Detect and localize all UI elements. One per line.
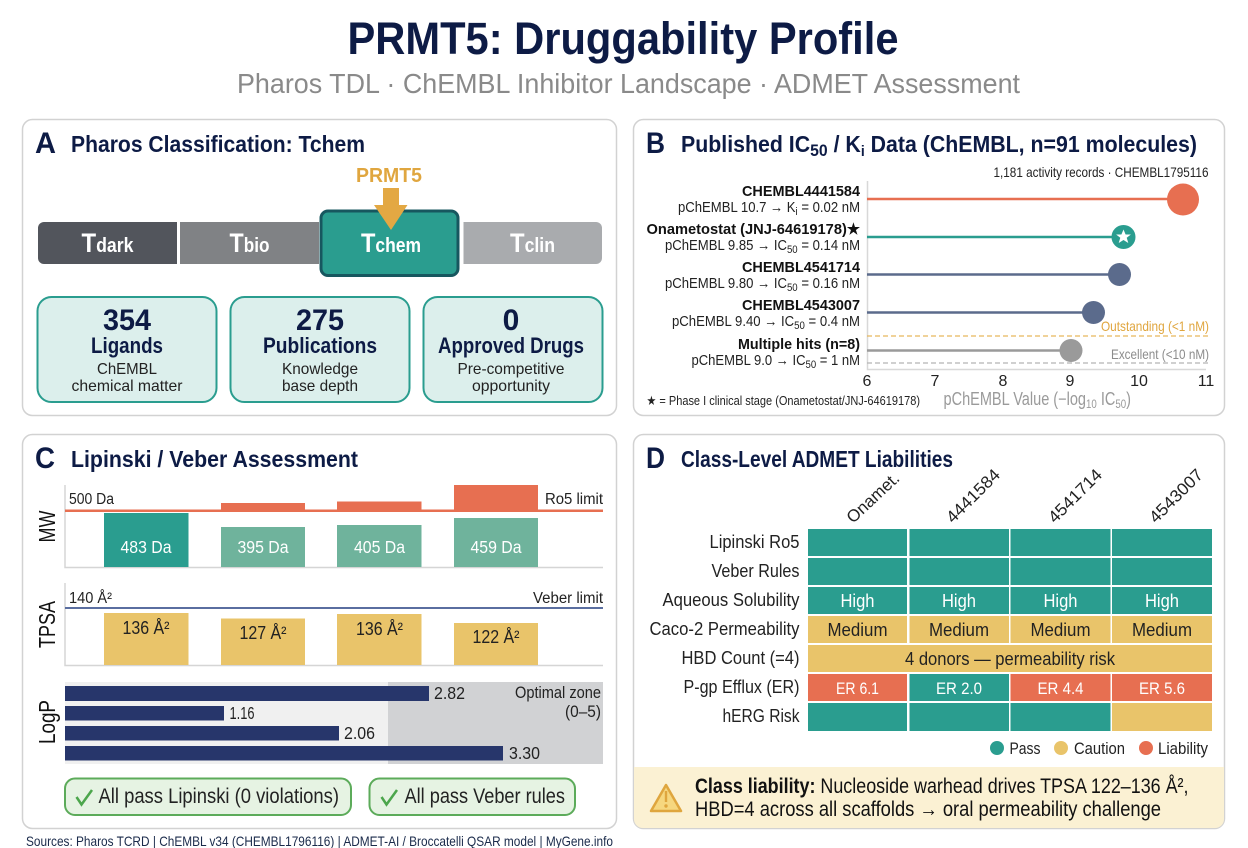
heatmap cell values <box>828 591 1192 698</box>
panel B heading: Published IC <box>681 131 820 157</box>
MW limit line: Ro5 limit <box>545 491 604 508</box>
row: CHEMBL4543007: CHEMBL4543007 <box>742 297 860 314</box>
row: CHEMBL4543007 <box>672 297 1105 332</box>
heatmap column headers: 4541714 <box>1044 465 1106 527</box>
row: Onametostat: = 0.14 nM <box>798 237 860 254</box>
MW bars: 405 Da <box>354 537 405 557</box>
row: CHEMBL4541714: = 0.16 nM <box>798 275 860 292</box>
panel B: published IC50 data <box>634 120 1224 416</box>
footnote: phase I star: ★ = Phase I clinical stage (Onametostat/JNJ-64619178) <box>646 393 920 408</box>
TPSA limit line <box>65 590 604 609</box>
chart: MW <box>34 485 604 568</box>
optimal zone label <box>515 684 601 721</box>
activity records note: 1,181 activity records · CHEMBL1795116 <box>994 164 1209 180</box>
x axis tick labels: 10 <box>1130 373 1148 390</box>
MW limit line <box>65 485 604 512</box>
legend: Caution <box>1074 739 1125 758</box>
legend: Pass <box>1010 739 1040 758</box>
panel B heading: i <box>861 143 865 160</box>
badge: all pass Veber: All pass Veber rules <box>404 785 565 808</box>
TPSA bars: 136 Å² <box>356 619 403 639</box>
panel D heading: Class-Level ADMET Liabilities <box>681 446 953 472</box>
stat card: ligands: chemical matter <box>72 378 183 395</box>
badge: all pass Veber <box>370 778 575 815</box>
callout: class liability <box>634 767 1224 828</box>
panel C: Lipinski / Veber <box>22 434 616 828</box>
stat card: approved drugs: opportunity <box>472 378 550 395</box>
TPSA limit line: Veber limit <box>533 590 604 607</box>
callout text: HBD=4 across all scaffolds → oral permeability challenge <box>695 798 1161 821</box>
heatmap row labels: hERG Risk <box>722 706 800 726</box>
LogP bars: 2.82 <box>434 683 465 703</box>
stat card: publications <box>230 297 410 402</box>
chart: LogP <box>34 682 603 764</box>
panel B heading: 50 <box>810 141 828 160</box>
row: CHEMBL4441584: = 0.02 nM <box>798 199 860 216</box>
badge: all pass Lipinski: All pass Lipinski (0 violations) <box>98 785 339 808</box>
TPSA bars: 122 Å² <box>472 627 520 647</box>
optimal zone label: (0–5) <box>565 703 601 721</box>
stat card: ligands: 354 <box>103 304 151 337</box>
MW bars <box>104 513 538 567</box>
callout text <box>695 775 1188 821</box>
title: PRMT5: Druggability Profile <box>348 13 898 64</box>
threshold: outstanding: Outstanding (<1 nM) <box>1101 318 1209 334</box>
heatmap cell values: High <box>1145 591 1179 611</box>
tier: Tchem highlighted <box>321 211 458 276</box>
tier: Tdark: Tdark <box>82 228 134 258</box>
x axis tick labels: 9 <box>1066 373 1075 390</box>
x axis title: pChEMBL Value (−log <box>944 389 1120 409</box>
threshold: excellent: Excellent (<10 nM) <box>1111 346 1209 362</box>
row: CHEMBL4543007: 50 <box>794 320 805 332</box>
heatmap row labels: Caco-2 Permeability <box>650 619 800 639</box>
stat card: approved drugs: 0 <box>503 304 519 337</box>
callout text: Class liability: Nucleoside warhead drives TPSA 122–136 Å², <box>695 775 1188 798</box>
tier: Tclin: Tclin <box>510 228 555 258</box>
x axis title: 50 <box>1115 397 1126 411</box>
arrow: PRMT5 to Tchem <box>374 188 408 230</box>
row: CHEMBL4541714: 50 <box>787 282 798 294</box>
heatmap cell values: ER 2.0 <box>936 679 982 698</box>
heatmap cell values: High <box>1044 591 1078 611</box>
heatmap cell values: Medium <box>1132 620 1192 640</box>
tier: Tbio <box>180 222 319 264</box>
heatmap cell values: ER 6.1 <box>836 679 879 698</box>
MW bars: 459 Da <box>470 537 522 557</box>
MW bars: 395 Da <box>238 537 289 557</box>
stat card: ligands <box>38 297 216 402</box>
heatmap cell values: ER 4.4 <box>1038 679 1084 698</box>
heatmap cell values: Medium <box>929 620 989 640</box>
stat card: publications: Publications <box>263 333 377 358</box>
stat card: approved drugs <box>424 297 602 402</box>
row: multiple hits: = 1 nM <box>816 352 860 369</box>
row: multiple hits: 50 <box>806 359 816 371</box>
row: CHEMBL4543007: pChEMBL 9.40 → IC <box>672 313 812 330</box>
heatmap cell values: High <box>840 591 874 611</box>
TPSA limit line: 140 Å² <box>69 590 112 607</box>
optimal zone label: Optimal zone <box>515 684 601 702</box>
PRMT5 marker label: PRMT5 <box>356 165 422 187</box>
tier: Tclin <box>464 222 602 264</box>
row: Onametostat <box>646 221 1136 256</box>
panel A: Pharos classification <box>22 120 616 416</box>
legend <box>990 739 1208 758</box>
heatmap row labels: P-gp Efflux (ER) <box>684 677 800 697</box>
panel C heading: Lipinski / Veber Assessment <box>71 446 358 472</box>
x axis tick labels: 7 <box>931 373 940 390</box>
legend: Liability <box>1158 739 1208 758</box>
TPSA bars: 136 Å² <box>122 618 170 638</box>
x axis tick labels: 11 <box>1198 373 1214 390</box>
x axis tick labels: 8 <box>999 373 1008 390</box>
x axis tick labels <box>863 373 1214 390</box>
tier: Tdark <box>38 222 177 264</box>
panel B letter: B <box>646 127 665 160</box>
LogP bars <box>65 683 540 763</box>
LogP bars: 2.06 <box>344 723 375 743</box>
x axis title: 10 <box>1086 397 1097 411</box>
stat card: approved drugs: Pre-competitive <box>458 361 565 378</box>
icon: warning triangle <box>651 785 681 811</box>
stat card: ligands: Ligands <box>91 333 163 358</box>
subtitle: Pharos TDL · ChEMBL Inhibitor Landscape · ADMET Assessment <box>237 68 1020 99</box>
stat card: ligands: ChEMBL <box>97 361 157 378</box>
badge: all pass Lipinski <box>65 778 351 815</box>
row: CHEMBL4441584: pChEMBL 10.7 → K <box>678 199 813 216</box>
row: Onametostat: pChEMBL 9.85 → IC <box>665 237 805 254</box>
row: Onametostat: Onametostat (JNJ-64619178)★ <box>646 221 861 238</box>
row: CHEMBL4541714: CHEMBL4541714 <box>742 259 861 276</box>
row: CHEMBL4541714 <box>665 259 1131 294</box>
row: CHEMBL4441584: CHEMBL4441584 <box>742 183 861 200</box>
heatmap cell values: 4 donors — permeability risk <box>905 649 1116 669</box>
heatmap row labels: HBD Count (=4) <box>682 648 800 668</box>
panel B heading: Data (ChEMBL, n=91 molecules) <box>865 131 1197 157</box>
heatmap cell values: ER 5.6 <box>1139 679 1185 698</box>
row: multiple hits: Multiple hits (n=8) <box>738 336 860 353</box>
row: CHEMBL4541714: pChEMBL 9.80 → IC <box>665 275 805 292</box>
LogP bars: 1.16 <box>230 703 254 723</box>
stat card: publications: base depth <box>282 378 358 395</box>
heatmap row labels: Aqueous Solubility <box>662 590 800 610</box>
heatmap row labels: Lipinski Ro5 <box>710 532 800 552</box>
heatmap cell values: High <box>942 591 976 611</box>
panel A letter: A <box>35 127 56 160</box>
LogP axis label: LogP <box>34 700 60 744</box>
x axis title: IC <box>1097 389 1115 409</box>
stat card: publications: Knowledge <box>282 361 358 378</box>
MW bars: 483 Da <box>120 537 172 557</box>
TPSA bars: 127 Å² <box>240 623 286 643</box>
heatmap column headers: Onamet. <box>843 469 903 527</box>
lollipop chart <box>646 181 1214 411</box>
MW limit line: 500 Da <box>69 491 114 508</box>
panel D letter: D <box>646 442 665 475</box>
stat card: approved drugs: Approved Drugs <box>438 333 584 358</box>
panel C letter: C <box>35 442 55 475</box>
row: CHEMBL4441584 <box>678 183 1199 218</box>
heatmap row labels <box>650 532 800 726</box>
TPSA bars <box>104 613 538 665</box>
panel A heading: Pharos Classification: Tchem <box>71 131 365 157</box>
heatmap row labels: Veber Rules <box>712 561 800 581</box>
row: multiple hits <box>692 336 1082 371</box>
row: CHEMBL4543007: = 0.4 nM <box>805 313 860 330</box>
x axis title: ) <box>1126 389 1131 409</box>
row: CHEMBL4441584: i <box>796 206 798 218</box>
row: Onametostat: 50 <box>787 244 798 256</box>
heatmap grid <box>808 529 1212 731</box>
heatmap column headers: 4543007 <box>1145 465 1207 527</box>
heatmap cell values: Medium <box>1030 620 1090 640</box>
LogP bars: 3.30 <box>509 743 540 763</box>
panel B heading: / K <box>828 131 861 157</box>
stat card: publications: 275 <box>296 304 344 337</box>
MW axis label: MW <box>34 510 60 542</box>
panel D: ADMET liabilities <box>634 434 1224 828</box>
heatmap column headers: 4441584 <box>942 465 1004 527</box>
heatmap column headers <box>843 465 1207 527</box>
x axis tick labels: 6 <box>863 373 872 390</box>
row: multiple hits: pChEMBL 9.0 → IC <box>692 352 823 369</box>
tier: Tchem highlighted: Tchem <box>361 228 421 258</box>
heatmap cell values: Medium <box>828 620 888 640</box>
TPSA axis label: TPSA <box>34 600 60 648</box>
chart: TPSA <box>34 583 604 666</box>
tier: Tbio: Tbio <box>230 228 270 258</box>
